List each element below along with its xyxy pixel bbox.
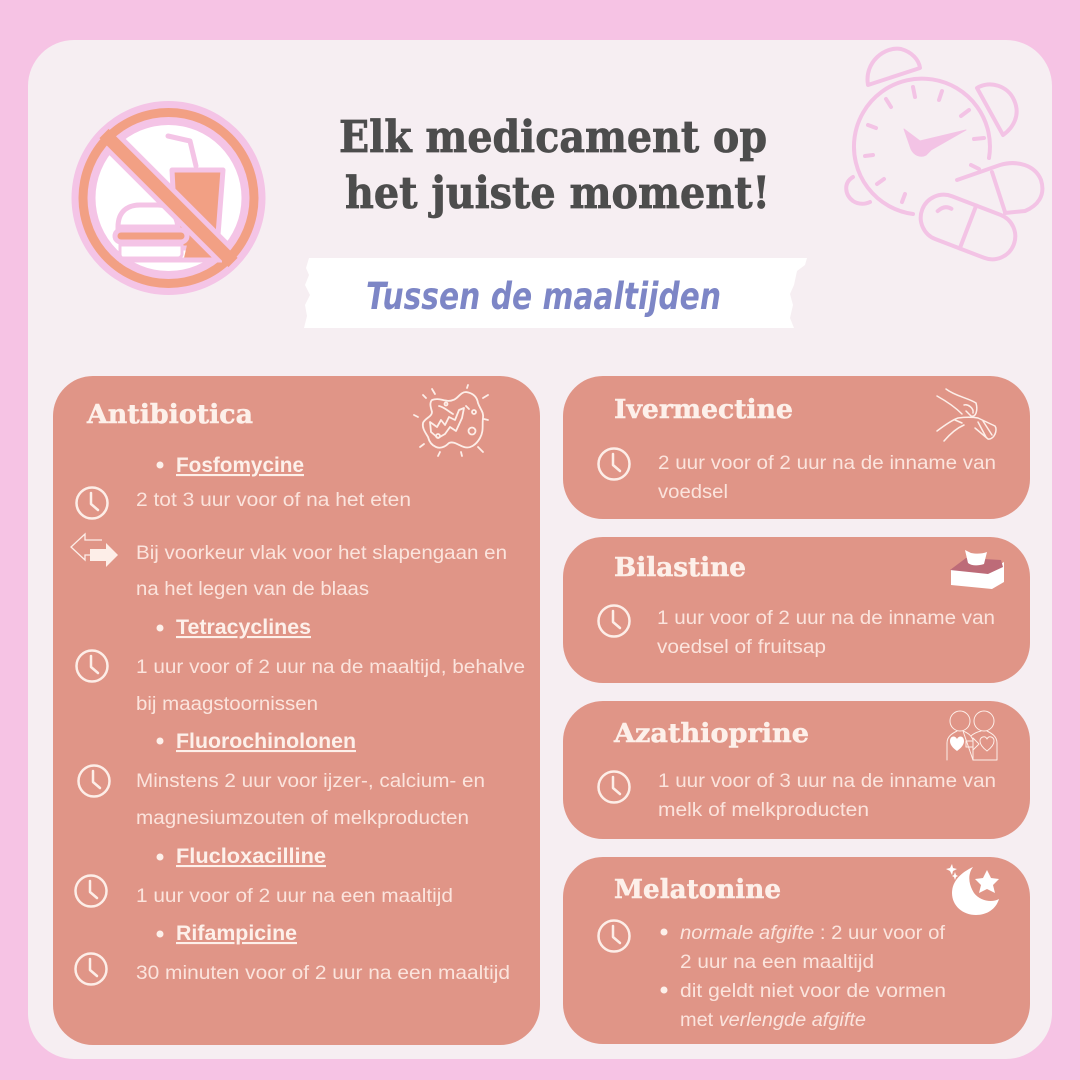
drug: Fluorochinolonen [136,730,485,829]
icon: no food or drink [72,101,266,295]
heading: Bilastine: Bilastine [614,553,746,583]
subtitle tape: Tussen de maaltijden [366,275,721,318]
drug: Tetracyclines: bij maagstoornissen [136,694,318,715]
title: Elk medicament op [339,112,767,163]
panel: Bilastine: 1 uur voor of 2 uur na de inname van [657,608,995,629]
icon: clock [76,488,108,518]
title [339,112,770,219]
drug: Flucloxacilline: Flucloxacilline [176,845,326,868]
icon: clock [598,606,630,636]
text: usage note: Bij voorkeur vlak voor het slapengaan en [136,543,507,564]
icon: clock [598,772,630,802]
panel: Bilastine: voedsel of fruitsap [657,637,826,658]
icon: two people with hearts [947,711,997,760]
text: melatonine notes: met verlengde afgifte [680,1010,866,1031]
drug: Tetracyclines [136,616,525,715]
title: het juiste moment! [345,168,770,219]
heading: Melatonine: Melatonine [614,875,781,905]
text: melatonine notes: normale afgifte : 2 uur voor of [680,923,946,944]
panel: Ivermectine: 2 uur voor of 2 uur na de inname van [658,453,996,474]
drug: Rifampicine [136,922,510,984]
icon: tissue box [950,550,1004,589]
icon: clock [598,448,630,480]
text: usage note [136,543,507,600]
drug: Rifampicine: Rifampicine [176,922,297,945]
subtitle tape [304,258,807,328]
icon: clock [76,876,106,906]
text: melatonine notes: 2 uur na een maaltijd [680,952,874,973]
icon: clock [76,954,106,984]
panel: Azathioprine: 1 uur voor of 3 uur na de inname van [658,771,996,792]
drug: Fluorochinolonen: Fluorochinolonen [176,730,356,753]
drug: Fosfomycine [136,454,411,511]
text: usage note: na het legen van de blaas [136,579,369,600]
icon: hand on wrist [937,389,996,441]
drug: Fluorochinolonen: Minstens 2 uur voor ijzer-, calcium- en [136,771,485,792]
drug: Flucloxacilline: 1 uur voor of 2 uur na een maaltijd [136,886,453,907]
panel: Antibiotica [53,376,540,1045]
icon: clock [598,920,630,952]
icon: bacteria [414,385,488,456]
panel: Azathioprine: melk of melkproducten [658,800,869,821]
drug: Fosfomycine: Fosfomycine [176,454,304,477]
panel: Ivermectine [563,376,1030,519]
panel: Melatonine [563,857,1030,1044]
icon: moon and star [946,864,999,915]
icon: alarm clock and pills [846,49,1042,266]
icon: swap arrows [71,534,118,567]
drug: Fosfomycine: 2 tot 3 uur voor of na het eten [136,490,411,511]
drug: Tetracyclines: 1 uur voor of 2 uur na de maaltijd, behalve [136,657,525,678]
drug: Flucloxacilline [136,845,453,907]
panel: Ivermectine: voedsel [658,482,728,503]
drug: Tetracyclines: Tetracyclines [176,616,311,639]
panel: Bilastine [563,537,1030,683]
icon: clock [76,650,108,682]
heading: Azathioprine: Azathioprine [613,719,809,749]
text: melatonine notes [660,923,946,1031]
drug: Rifampicine: 30 minuten voor of 2 uur na een maaltijd [136,963,510,984]
icon: clock [78,766,110,796]
heading: Ivermectine: Ivermectine [614,395,793,425]
panel: Azathioprine [563,701,1030,839]
text: melatonine notes: dit geldt niet voor de vormen [680,981,946,1002]
heading: Antibiotica: Antibiotica [86,400,253,430]
drug: Fluorochinolonen: magnesiumzouten of melkproducten [136,808,469,829]
